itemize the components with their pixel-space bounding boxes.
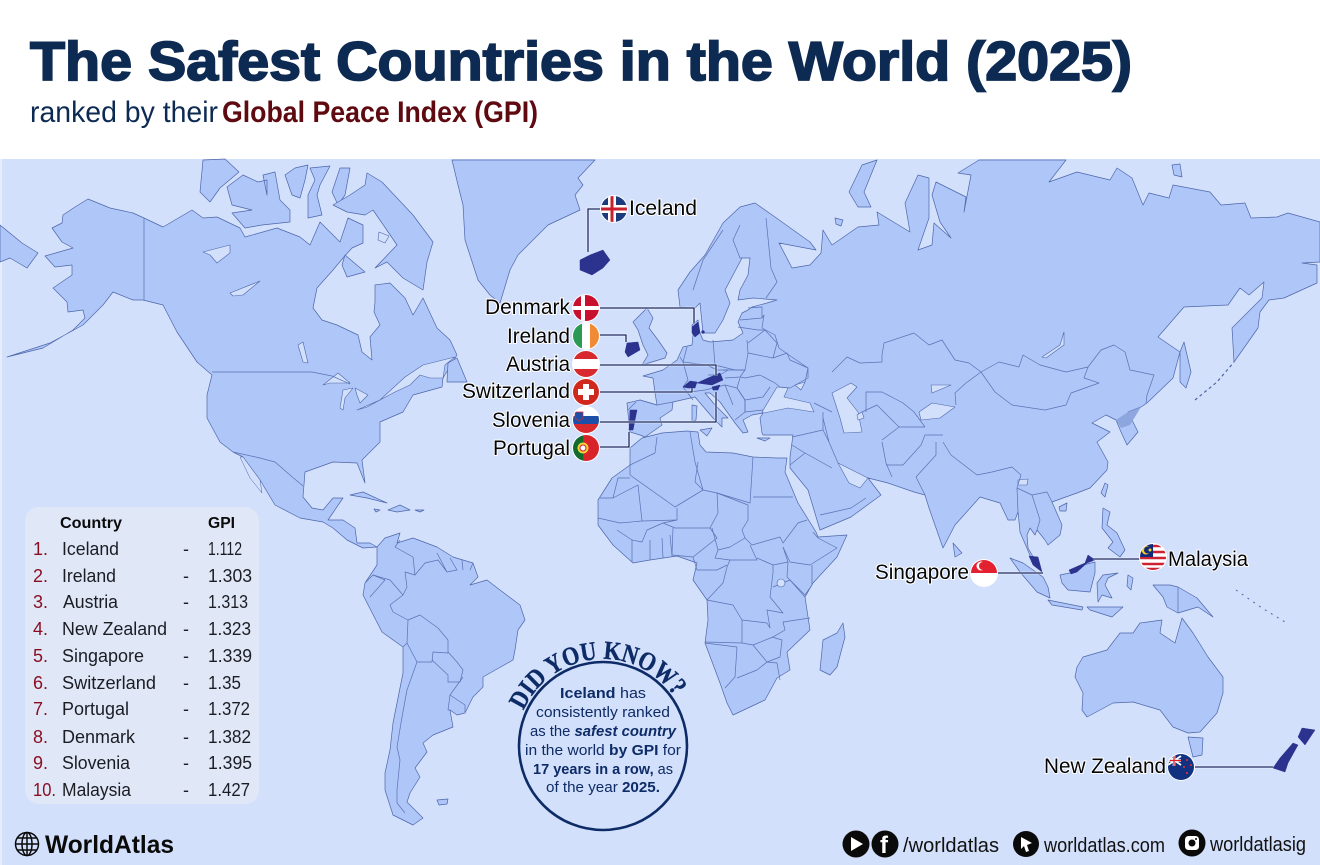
table header: GPI <box>208 515 235 532</box>
South American borders <box>365 540 473 813</box>
African borders <box>598 432 837 688</box>
title: The Safest Countries in the World (2025) <box>30 30 1132 92</box>
country names: Singapore <box>62 646 144 666</box>
ranking table <box>25 507 259 804</box>
North American borders <box>144 218 350 486</box>
dashes <box>183 539 189 800</box>
GPI scores: 1.427 <box>208 780 250 800</box>
Madagascar <box>820 623 845 675</box>
label: Portugal: Portugal <box>493 437 570 460</box>
label: Singapore <box>875 559 998 587</box>
label: Portugal <box>493 434 600 462</box>
country names: Malaysia <box>62 780 132 800</box>
label: Malaysia: Malaysia <box>1168 548 1248 571</box>
rank numbers <box>33 539 56 800</box>
label: Slovenia: Slovenia <box>492 409 570 432</box>
label: Austria <box>506 350 600 378</box>
label: Ireland: Ireland <box>507 325 570 348</box>
GPI scores <box>208 539 252 800</box>
WorldAtlas logo: WorldAtlas <box>45 831 174 859</box>
dashes: - <box>183 727 189 747</box>
subtitle: Global Peace Index (GPI) <box>222 96 538 129</box>
Greenland <box>452 160 595 303</box>
rank numbers: 6. <box>33 673 48 693</box>
rank numbers: 1. <box>33 539 48 559</box>
callout body <box>525 685 681 796</box>
icon: instagram <box>1178 830 1206 856</box>
GPI scores: 1.323 <box>208 619 251 639</box>
label: New Zealand: New Zealand <box>1044 755 1166 778</box>
label: Malaysia <box>1139 543 1248 571</box>
social links <box>842 830 1306 859</box>
Slovenia <box>712 385 720 390</box>
Australia <box>1075 618 1223 733</box>
Iceland <box>580 250 610 275</box>
handle: worldatlas: /worldatlas <box>903 835 999 857</box>
North American lakes and gulf <box>203 232 455 410</box>
table header: Country <box>60 515 122 532</box>
GPI scores: 1.313 <box>208 592 248 612</box>
Africa <box>598 431 847 715</box>
Kuril island arc <box>1195 362 1234 400</box>
GPI scores: 1.382 <box>208 727 251 747</box>
Papua border <box>1177 587 1179 613</box>
label: Austria: Austria <box>506 353 570 376</box>
country names: Slovenia <box>62 753 131 773</box>
label: Slovenia <box>492 406 600 434</box>
label: New Zealand <box>1044 753 1195 781</box>
rank numbers: 9. <box>33 753 48 773</box>
Denmark <box>692 322 700 337</box>
country names: Switzerland <box>62 673 156 693</box>
label: Singapore: Singapore <box>875 561 969 584</box>
callout body: consistently ranked <box>536 704 670 721</box>
dashes: - <box>183 780 189 800</box>
Eurasia <box>627 160 1320 572</box>
Malaysia <box>1029 556 1042 572</box>
callout heading: DID YOU KNOW? <box>508 641 686 710</box>
label: Iceland: Iceland <box>629 197 697 220</box>
icon: facebook <box>872 830 898 859</box>
country names: Iceland <box>62 539 119 559</box>
dashes: - <box>183 673 189 693</box>
Asian and European borders <box>628 218 1154 530</box>
Lake Victoria <box>777 579 785 587</box>
country names: Austria <box>63 592 119 612</box>
GPI scores: 1.112 <box>208 539 242 559</box>
highlighted countries <box>580 250 1315 772</box>
Arctic islands <box>0 159 467 382</box>
icon: play <box>842 830 870 858</box>
dashes: - <box>183 753 189 773</box>
label: Switzerland <box>462 378 600 406</box>
leader lines <box>588 209 1273 767</box>
Switzerland <box>683 381 697 388</box>
rank numbers: 5. <box>33 646 48 666</box>
callout body: of the year 2025. <box>546 779 660 796</box>
did you know callout <box>508 641 688 832</box>
dashes: - <box>183 699 189 719</box>
callout body: as the safest country <box>530 723 677 740</box>
GPI scores: 1.35 <box>208 673 241 693</box>
rank numbers: 2. <box>33 566 48 586</box>
country names: Portugal <box>62 699 129 719</box>
country names: Ireland <box>62 566 116 586</box>
country names: New Zealand <box>62 619 167 639</box>
rank numbers: 7. <box>33 699 48 719</box>
dashes: - <box>183 592 189 612</box>
Caribbean islands <box>350 492 424 512</box>
South America <box>363 533 525 825</box>
label: Iceland <box>600 195 697 223</box>
label: Denmark <box>485 294 600 322</box>
Pacific island scatter <box>1236 590 1285 622</box>
label: Ireland <box>507 322 600 350</box>
North America <box>7 199 457 548</box>
Falkland Islands <box>437 799 448 805</box>
Eurasian islands <box>633 160 1213 757</box>
label: Denmark: Denmark <box>485 296 570 319</box>
Ireland <box>625 342 640 357</box>
icon: globe <box>16 832 38 856</box>
rank numbers: 10. <box>33 780 56 800</box>
callout body: in the world by GPI for <box>525 742 681 759</box>
instagram handle: worldatlasig <box>1209 834 1306 856</box>
New Zealand <box>1298 728 1315 745</box>
inland seas and lakes of Eurasia <box>762 332 1064 488</box>
rank numbers: 3. <box>33 592 48 612</box>
icon: facebook: f <box>880 832 889 859</box>
Portugal <box>629 410 637 430</box>
table header <box>60 515 235 532</box>
GPI scores: 1.339 <box>208 646 252 666</box>
dashes: - <box>183 646 189 666</box>
Austria <box>697 373 723 385</box>
rank numbers: 4. <box>33 619 48 639</box>
rank numbers: 8. <box>33 727 48 747</box>
label: Switzerland: Switzerland <box>462 380 570 403</box>
subtitle: ranked by their <box>30 96 218 129</box>
dashes: - <box>183 539 189 559</box>
country names <box>62 539 167 800</box>
GPI scores: 1.303 <box>208 566 252 586</box>
website: worldatlas.com <box>1043 835 1165 857</box>
callout body: 17 years in a row, as <box>533 761 673 778</box>
country names: Denmark <box>62 727 136 747</box>
dashes: - <box>183 619 189 639</box>
North Korea shading <box>1116 407 1141 428</box>
callout body: Iceland has <box>560 685 646 702</box>
Baja California <box>240 457 262 493</box>
GPI scores: 1.395 <box>208 753 252 773</box>
icon: cursor <box>1013 831 1039 857</box>
GPI scores: 1.372 <box>208 699 250 719</box>
dashes: - <box>183 566 189 586</box>
